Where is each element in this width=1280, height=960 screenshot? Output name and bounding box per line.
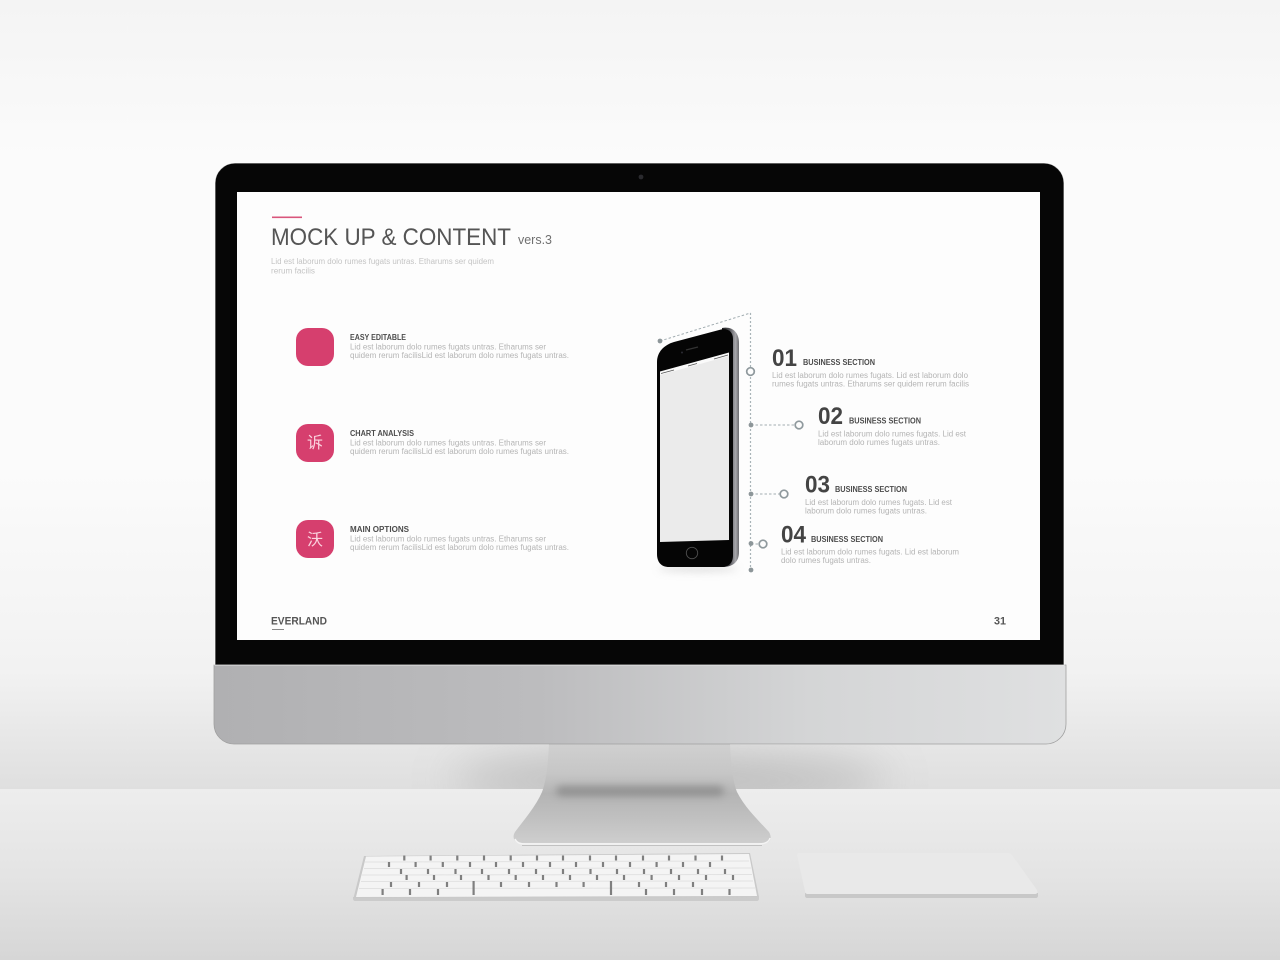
number: 04 — [781, 522, 807, 548]
feature text: Lid est laborum dolo rumes fugats untras. Etharums ser — [350, 438, 546, 448]
description: laborum dolo rumes fugats untras. — [805, 506, 927, 516]
icon tile: glyph — [296, 424, 334, 462]
feature text: Lid est laborum dolo rumes fugats untras. Etharums ser — [350, 342, 546, 352]
phone metal side — [722, 328, 739, 567]
phone mockup — [657, 328, 739, 572]
speaker — [686, 347, 698, 350]
feature text: quidem rerum facilisLid est laborum dolo rumes fugats untras. — [350, 351, 569, 360]
connector rings — [747, 368, 803, 548]
monitor stand — [514, 744, 771, 846]
version label: vers.3 — [518, 232, 552, 247]
icon tile: glyph: 沃 — [307, 531, 323, 549]
icon tile: blank — [296, 328, 334, 366]
slide header — [271, 216, 552, 276]
monitor chin — [214, 665, 1066, 744]
description: Lid est laborum dolo rumes fugats. Lid est — [805, 498, 953, 507]
label: BUSINESS SECTION — [803, 358, 875, 367]
number: 02 — [818, 403, 843, 430]
description — [805, 498, 953, 516]
background: desk — [0, 789, 1280, 960]
description: laborum dolo rumes fugats untras. — [818, 438, 940, 447]
feature text — [350, 342, 569, 360]
webcam — [639, 175, 643, 179]
front camera — [681, 352, 683, 354]
keyboard deck — [354, 853, 759, 898]
subtitle — [271, 257, 494, 276]
icon tile: glyph — [296, 520, 334, 558]
feature text: Lid est laborum dolo rumes fugats untras. Etharums ser — [350, 534, 546, 544]
description: Lid est laborum dolo rumes fugats. Lid est laborum dolo — [772, 371, 969, 380]
section 04 — [781, 522, 959, 565]
horizontal dashed lines — [751, 425, 795, 544]
feature text — [350, 438, 569, 456]
key gaps — [383, 856, 733, 895]
home button — [686, 547, 698, 559]
key surface — [356, 854, 757, 897]
label: BUSINESS SECTION — [849, 416, 921, 426]
top dashed line — [660, 313, 750, 341]
trackpad lip — [805, 893, 1038, 898]
section 02 — [818, 403, 967, 447]
number: 03 — [805, 472, 830, 498]
number: 01 — [772, 345, 797, 372]
keyboard — [353, 853, 759, 901]
feature title: EASY EDITABLE — [350, 333, 407, 342]
feature text: quidem rerum facilisLid est laborum dolo rumes fugats untras. — [350, 543, 569, 552]
feature title: MAIN OPTIONS — [350, 525, 410, 534]
trackpad — [797, 853, 1038, 898]
description — [818, 430, 967, 447]
row lines — [359, 861, 755, 888]
accent rule — [272, 216, 302, 218]
feature: easy editable — [296, 328, 569, 366]
section 01 — [772, 345, 969, 388]
description: Lid est laborum dolo rumes fugats. Lid est — [818, 430, 967, 438]
status bar details — [661, 355, 728, 374]
monitor bezel — [215, 163, 1064, 665]
vertical dotted line — [750, 313, 752, 570]
phone screen — [660, 353, 729, 542]
description: Lid est laborum dolo rumes fugats. Lid est laborum — [781, 548, 959, 556]
phone shadow — [658, 566, 738, 572]
page number: 31 — [994, 616, 1006, 628]
description: dolo rumes fugats untras. — [781, 556, 871, 565]
keyboard shadow lip — [353, 897, 759, 901]
feature: chart analysis — [296, 424, 569, 462]
connector dots — [658, 339, 753, 572]
feature text: quidem rerum facilisLid est laborum dolo rumes fugats untras. — [350, 447, 569, 456]
slide screen — [237, 192, 1040, 640]
slide footer — [271, 616, 1006, 630]
feature title: CHART ANALYSIS — [350, 429, 415, 438]
feature text — [350, 534, 569, 552]
phone body — [657, 329, 733, 567]
label: BUSINESS SECTION — [835, 485, 907, 494]
trackpad surface — [797, 853, 1037, 894]
icon tile: glyph: 诉 — [307, 434, 323, 452]
description — [781, 548, 959, 565]
description: rumes fugats untras. Etharums ser quidem rerum facilis — [772, 380, 969, 388]
label: BUSINESS SECTION — [811, 535, 883, 544]
subtitle: Lid est laborum dolo rumes fugats untras. Etharums ser quidem — [271, 257, 494, 266]
feature: main options — [296, 520, 569, 558]
subtitle: rerum facilis — [271, 266, 315, 276]
status bar — [660, 352, 729, 375]
description — [772, 371, 969, 388]
brand: EVERLAND — [271, 616, 327, 628]
monitor shadow on wall — [455, 745, 884, 789]
callout connectors — [658, 313, 803, 572]
brand rule — [272, 629, 284, 630]
section 03 — [805, 472, 953, 516]
title: MOCK UP & CONTENT — [271, 224, 511, 251]
